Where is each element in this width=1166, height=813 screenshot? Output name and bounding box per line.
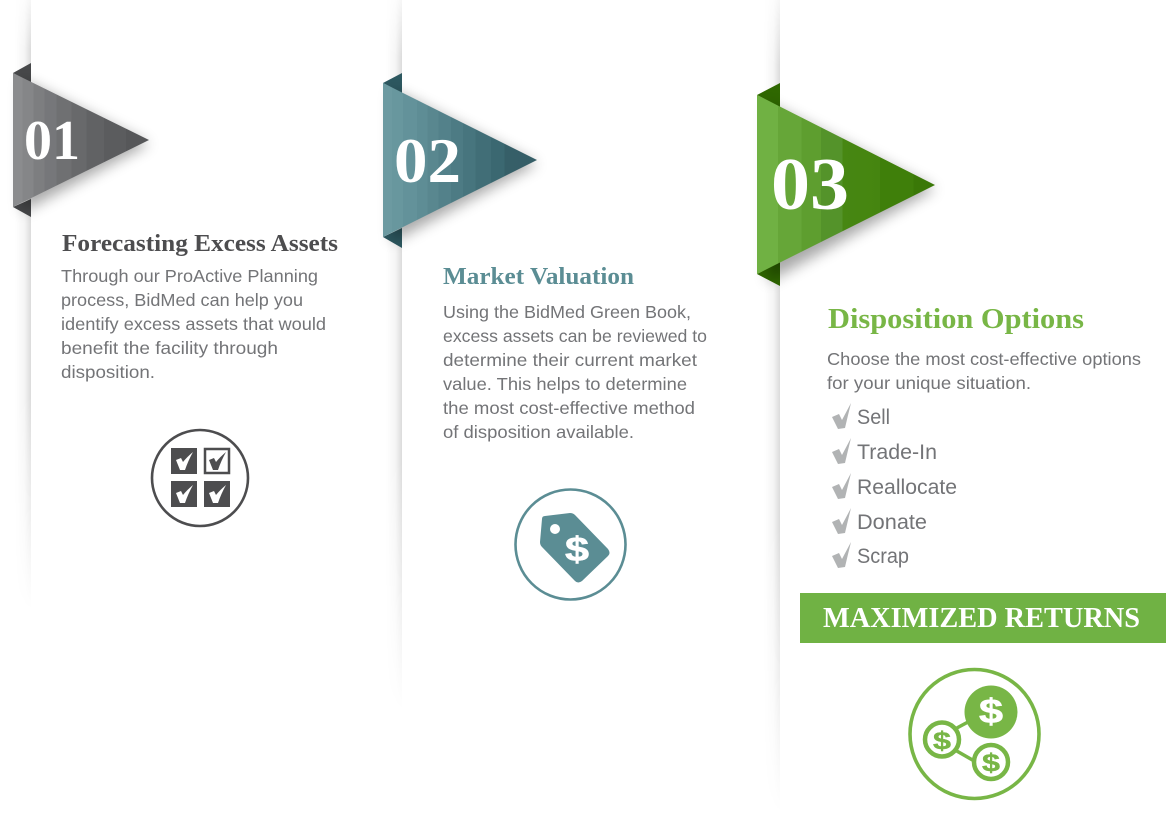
text block: step 2 description: the most cost-effective method	[443, 398, 695, 418]
text block: step 3 description	[827, 349, 1141, 393]
icon: price tag	[516, 490, 626, 600]
list: disposition options: Scrap	[857, 545, 909, 568]
heading: Market Valuation: Market Valuation	[443, 264, 634, 290]
list: disposition options: Donate	[857, 511, 927, 534]
text block: step 1 description: identify excess assets that would	[61, 314, 326, 334]
list: disposition options: Sell	[857, 406, 890, 429]
panel: step 3	[757, 83, 1166, 798]
text block: step 2 description: value. This helps to determine	[443, 374, 687, 394]
text block: step 1 description: benefit the facility through	[61, 338, 278, 358]
text block: step 2 description: determine their current market	[443, 350, 697, 370]
banner: maximized returns	[800, 593, 1166, 643]
text block: step 3 description: for your unique situation.	[827, 373, 1031, 393]
icon: connected dollar coins: $	[982, 749, 1000, 777]
text block: step 1 description: Through our ProActive Planning	[61, 266, 318, 286]
icon: checklist	[152, 430, 248, 526]
list: disposition options	[832, 403, 957, 568]
text block: step 2 description	[443, 302, 707, 442]
icon: connected dollar coins: $	[933, 727, 951, 755]
number 01: 01	[24, 110, 80, 172]
arrow: step 3 ribbon	[757, 83, 935, 286]
text block: step 2 description: of disposition available.	[443, 422, 634, 442]
icon: price tag: $	[565, 531, 589, 569]
arrow: step 2 ribbon	[383, 73, 537, 248]
list: disposition options: Trade-In	[857, 441, 937, 464]
list: disposition options: Reallocate	[857, 476, 957, 499]
banner: maximized returns: MAXIMIZED RETURNS	[823, 602, 1140, 634]
icon: connected dollar coins	[910, 670, 1039, 798]
number 03: 03	[771, 144, 849, 226]
icon: connected dollar coins: $	[979, 693, 1003, 731]
arrow: step 1 ribbon	[13, 63, 149, 217]
column shadow 3	[772, 0, 780, 744]
panel: step 1	[13, 63, 338, 526]
text block: step 1 description: disposition.	[61, 362, 155, 382]
text block: step 2 description: Using the BidMed Green Book,	[443, 302, 691, 322]
text block: step 3 description: Choose the most cost-effective options	[827, 349, 1141, 369]
column shadow 1	[23, 0, 31, 558]
text block: step 1 description: process, BidMed can help you	[61, 290, 303, 310]
number 02: 02	[394, 125, 461, 196]
panel: step 2	[383, 73, 707, 600]
heading: Disposition Options: Disposition Options	[828, 303, 1084, 335]
text block: step 2 description: excess assets can be reviewed to	[443, 326, 707, 346]
heading: Forecasting Excess Assets: Forecasting Excess Assets	[62, 231, 338, 257]
column shadow 2	[394, 0, 402, 650]
text block: step 1 description	[61, 266, 326, 382]
